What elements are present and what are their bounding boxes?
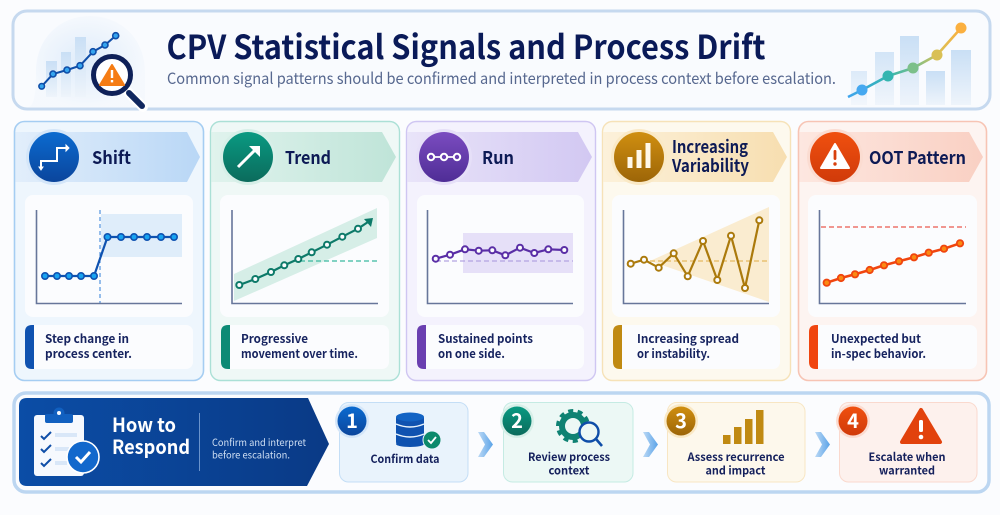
description: Shift (25, 325, 193, 369)
icon: gear and magnifier (558, 411, 602, 446)
header band: Trend (212, 132, 396, 182)
panel: Run (406, 122, 596, 380)
description: Run: on one side. (438, 345, 505, 362)
icon: chart with magnifier and warning (28, 16, 145, 107)
step 1: Confirm data (335, 402, 468, 482)
label (528, 449, 610, 478)
description: Run (417, 325, 584, 369)
heading: Increasing Variability: Increasing (672, 134, 748, 159)
badge 3: 3 (675, 405, 687, 434)
icon: clipboard with check (34, 408, 99, 476)
description: OOT Pattern: Unexpected but (831, 330, 921, 347)
heading: Run: Run (482, 145, 514, 170)
header band: OOT Pattern (800, 132, 983, 182)
badge 4: 4 (847, 405, 859, 434)
subtitle: Common signal patterns should be confirmed and interpreted in process context before escalation. (167, 67, 836, 89)
label: Review process (528, 449, 610, 465)
label: Assess recurrence (687, 449, 785, 465)
description: Trend (221, 325, 389, 369)
label: Confirm data (370, 451, 440, 467)
heading: Increasing Variability (671, 134, 749, 178)
chart box: Trend (220, 195, 389, 317)
header band: Shift (16, 132, 200, 182)
label (687, 449, 785, 478)
description: Trend: Progressive (241, 330, 308, 347)
step 3: Assess recurrence and impact (664, 402, 805, 482)
header band: Increasing Variability (604, 132, 787, 182)
icon: bars (611, 129, 667, 185)
icon: rising multicolour chart (848, 22, 971, 105)
panel: Trend (210, 122, 400, 380)
heading: How to Respond: How to (112, 409, 176, 438)
icon: warning triangle (807, 129, 863, 185)
badge 1: 1 (346, 405, 358, 434)
label: and impact (706, 462, 766, 478)
text: confirm and interpret: before escalation. (212, 446, 290, 462)
description: Shift: Step change in (45, 330, 129, 347)
arrow 3 (815, 432, 830, 457)
label: context (548, 462, 590, 478)
heading: OOT Pattern: OOT Pattern (869, 145, 966, 170)
header band: Run (408, 132, 592, 182)
heading: Increasing Variability: Variability (671, 153, 749, 178)
description: Trend: movement over time. (241, 345, 358, 362)
description: Shift: process center. (45, 345, 132, 362)
heading: Shift: Shift (92, 145, 132, 170)
description: Increasing Variability (613, 325, 780, 369)
step 4: Escalate when warranted (836, 402, 977, 482)
text: confirm and interpret (212, 434, 306, 462)
badge 2: 2 (511, 405, 523, 434)
chart box: Run (417, 195, 584, 317)
banner: How to Respond (19, 398, 329, 486)
badge 4 (836, 404, 870, 438)
icon: connected dots (416, 129, 472, 185)
panel: Increasing Variability (602, 122, 790, 380)
title: CPV Statistical Signals and Process Drift (166, 21, 766, 69)
label: warranted (879, 462, 935, 478)
icon: warning triangle (902, 410, 940, 442)
panel: How to Respond (14, 393, 989, 492)
chart box: OOT Pattern (808, 195, 977, 317)
badge 3 (664, 404, 698, 438)
description: Increasing Variability: or instability. (637, 345, 710, 362)
description: OOT Pattern: in-spec behavior. (831, 345, 926, 362)
icon: database with check (396, 412, 441, 449)
chart box: Increasing Variability (612, 195, 780, 317)
heading: How to Respond: Respond (112, 431, 190, 460)
icon: rising bars (723, 410, 764, 444)
arrow 1 (478, 432, 493, 457)
description: Increasing Variability: Increasing spread (637, 330, 739, 347)
panel: OOT Pattern (798, 122, 986, 380)
icon: up-right arrow (220, 129, 276, 185)
description: OOT Pattern (809, 325, 977, 369)
panel: Shift (14, 122, 204, 380)
chart box: Shift (25, 195, 193, 317)
text: confirm and interpret: Confirm and interpret (212, 434, 306, 449)
header panel (13, 11, 990, 109)
heading: How to Respond (112, 409, 190, 460)
heading: Trend: Trend (285, 145, 331, 170)
label (868, 449, 946, 478)
arrow 2 (643, 432, 658, 457)
description: Run: Sustained points (438, 330, 533, 347)
icon: step arrow (26, 129, 82, 185)
step 2: Review process context (500, 402, 633, 482)
label: Escalate when (868, 449, 946, 465)
